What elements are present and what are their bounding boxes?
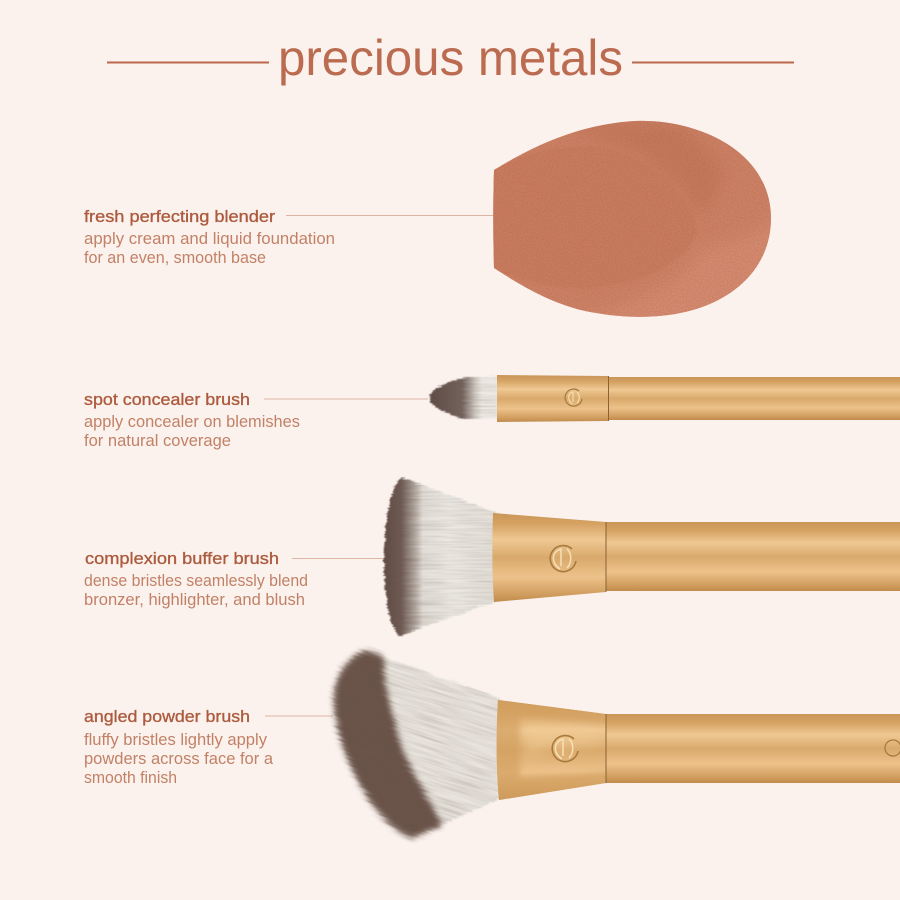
- label: powder description: angled powder brush: [84, 707, 250, 726]
- label: buffer description: [84, 549, 308, 609]
- label: powder description: smooth finish: [84, 769, 177, 787]
- label: buffer description: dense bristles seamlessly blend: [84, 572, 308, 590]
- leader line: buffer: [292, 558, 384, 560]
- label: powder description: powders across face for a: [84, 750, 274, 768]
- panel: fresh perfecting blender: [84, 118, 780, 330]
- icon: buffer brush: [384, 477, 900, 636]
- label: blender description: apply cream and liquid foundation: [84, 230, 335, 248]
- label: concealer description: for natural coverage: [84, 432, 231, 450]
- panel: spot concealer brush: [84, 375, 900, 450]
- label: blender description: for an even, smooth base: [84, 249, 266, 267]
- label: buffer description: bronzer, highlighter, and blush: [84, 591, 305, 609]
- label: buffer description: complexion buffer brush: [85, 549, 279, 568]
- panel: complexion buffer brush: [84, 477, 900, 636]
- icon: powder brush: [328, 646, 900, 842]
- label: blender description: fresh perfecting blender: [84, 207, 275, 226]
- label: blender description: [84, 207, 335, 267]
- label: concealer description: apply concealer on blemishes: [84, 413, 300, 431]
- title: precious metals: [278, 30, 623, 86]
- leader line: blender: [286, 214, 493, 216]
- leader line: powder: [265, 715, 333, 717]
- label: concealer description: spot concealer brush: [84, 390, 250, 409]
- leader line: concealer: [264, 398, 428, 400]
- icon: concealer brush: [429, 375, 900, 422]
- icon: makeup sponge: [493, 120, 771, 317]
- panel: angled powder brush: [84, 646, 900, 842]
- label: powder description: fluffy bristles lightly apply: [84, 731, 268, 749]
- label: concealer description: [84, 390, 300, 450]
- label: powder description: [84, 707, 274, 787]
